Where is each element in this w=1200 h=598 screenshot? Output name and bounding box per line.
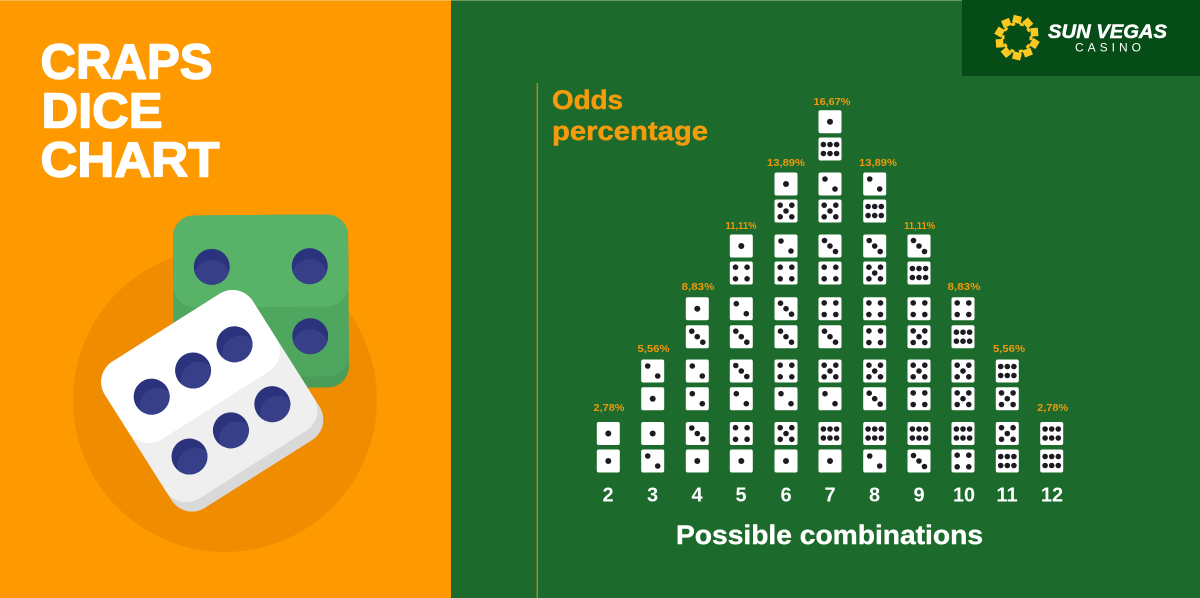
column: total 10: 8,83% xyxy=(948,282,981,293)
panel: orange left background xyxy=(0,0,451,598)
column: total 5: 5 xyxy=(735,485,747,507)
column: total 12: 12 xyxy=(1041,485,1063,507)
title: CHART xyxy=(40,134,220,188)
column: total 3: 5,56% xyxy=(638,344,670,355)
column: total 7: 16,67% xyxy=(814,97,851,108)
logo: Sun Vegas Casino xyxy=(962,0,1200,76)
column: total 11 xyxy=(993,344,1025,507)
column: total 5 xyxy=(726,221,757,507)
column: total 3 xyxy=(638,344,670,507)
column: total 2: 2 xyxy=(602,485,614,507)
column: total 12 xyxy=(1037,403,1068,507)
axis line xyxy=(537,83,538,598)
column: total 2: 2,78% xyxy=(594,403,625,414)
illustration: two dice on circle xyxy=(73,214,377,552)
column: total 3: 3 xyxy=(647,485,658,507)
heading: odds percentage: Odds xyxy=(552,85,623,115)
background circle xyxy=(73,248,377,552)
title: DICE xyxy=(42,84,162,138)
column: total 5: 11,11% xyxy=(726,221,757,232)
column: total 7: 7 xyxy=(824,485,836,507)
logo subtitle: CASINO xyxy=(1075,41,1141,55)
title xyxy=(40,36,220,188)
heading: odds percentage: percentage xyxy=(552,116,708,146)
column: total 8 xyxy=(859,158,897,507)
column: total 9: 11,11% xyxy=(904,221,935,232)
column: total 11: 5,56% xyxy=(993,344,1025,355)
column: total 4: 4 xyxy=(691,485,703,507)
column: total 8: 8 xyxy=(869,485,880,507)
axis label: possible combinations: Possible combinations xyxy=(676,520,983,550)
panel: green right background xyxy=(451,0,1200,598)
icon: sun emblem xyxy=(994,15,1040,61)
column: total 6 xyxy=(767,158,805,507)
column: total 12: 2,78% xyxy=(1037,403,1068,414)
column: total 4 xyxy=(682,282,715,507)
title: CRAPS xyxy=(40,36,212,90)
column: total 6: 13,89% xyxy=(767,158,805,169)
column: total 9: 9 xyxy=(913,485,925,507)
column: total 10 xyxy=(948,282,981,507)
column: total 4: 8,83% xyxy=(682,282,715,293)
column: total 8: 13,89% xyxy=(859,158,897,169)
column: total 6: 6 xyxy=(780,485,792,507)
column: total 10: 10 xyxy=(953,485,975,507)
column: total 7 xyxy=(814,97,851,507)
icon: white die xyxy=(92,281,332,521)
column: total 11: 11 xyxy=(996,485,1018,507)
icon: green die xyxy=(173,214,349,389)
heading: odds percentage xyxy=(552,85,708,146)
logo wordmark: SUN VEGAS xyxy=(1048,22,1167,43)
column: total 9 xyxy=(904,221,935,507)
column: total 2 xyxy=(594,403,625,507)
